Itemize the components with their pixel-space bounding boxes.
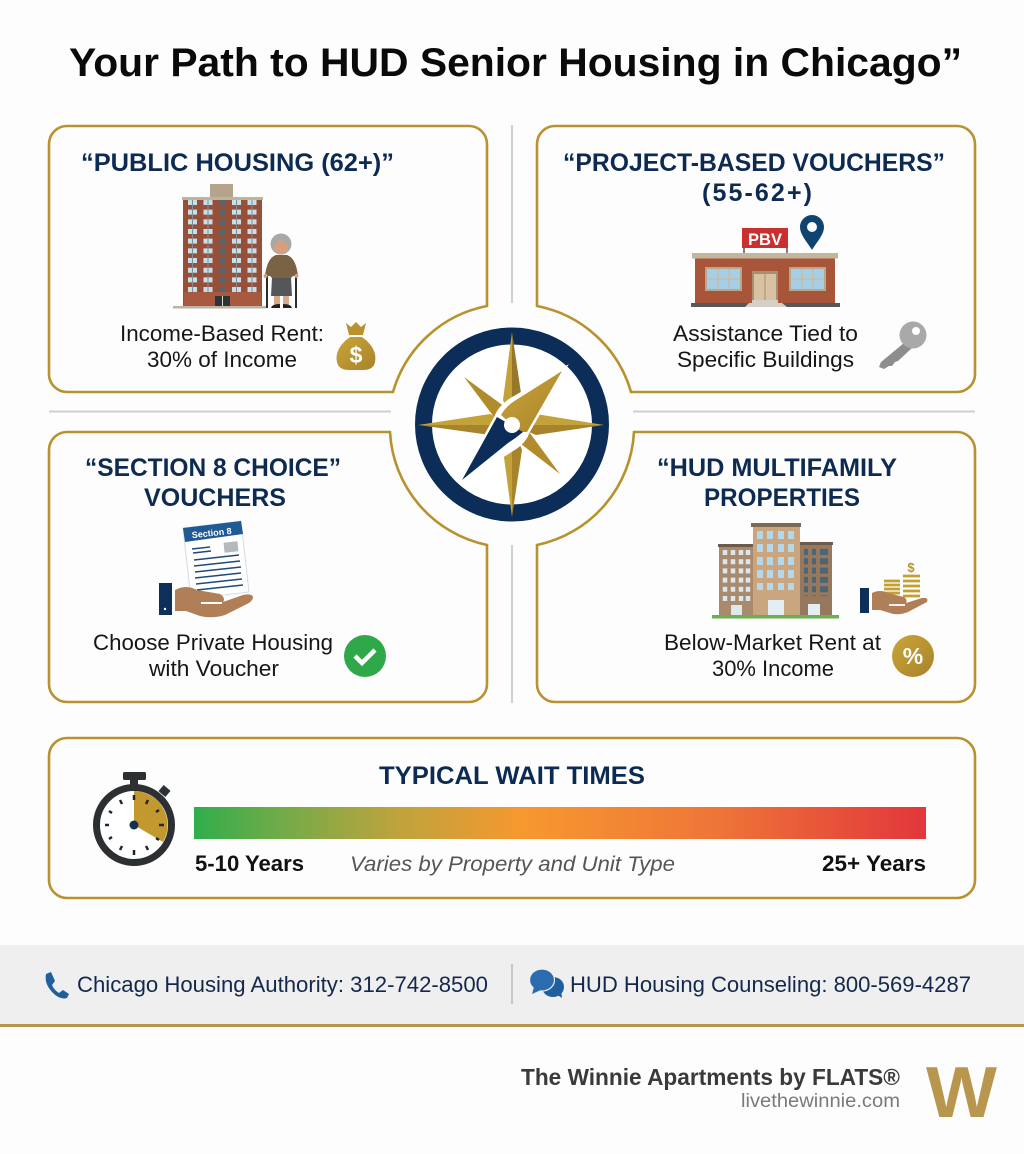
text: website: livethewinnie.com: [741, 1091, 900, 1112]
icon: compass: [418, 332, 604, 517]
heading: typical wait times: TYPICAL WAIT TIMES: [379, 762, 645, 790]
panel outline: section 8 choice vouchers: [49, 432, 487, 702]
icon: green check: [344, 635, 386, 677]
panel outline: public housing: [49, 126, 487, 392]
icon: location pin: [800, 215, 824, 250]
panel outline: HUD multifamily properties: [537, 432, 975, 702]
text: assistance tied to buildings: [673, 321, 858, 372]
text: choose private housing: Choose Private Housing: [93, 630, 333, 655]
panel: HUD multifamily properties: [537, 432, 975, 702]
chart: wait time gradient bar: [194, 807, 926, 839]
icon: money bag: $: [350, 342, 363, 368]
icon: hand with coins: [860, 560, 927, 614]
icon: senior woman with canes: [264, 234, 298, 308]
heading: project-based vouchers: [563, 149, 945, 207]
heading: public housing: “PUBLIC HOUSING (62+)”: [81, 149, 394, 177]
panel: public housing: [49, 126, 487, 392]
text: income based rent: [120, 321, 324, 372]
text: assistance tied to buildings: Assistance Tied to: [673, 321, 858, 346]
icon: money bag: [337, 322, 375, 370]
panel: section 8 choice vouchers: [49, 432, 487, 702]
icon: stopwatch: [96, 772, 172, 862]
logo: W: W: [926, 1053, 997, 1133]
text: assistance tied to buildings: Specific Buildings: [677, 347, 854, 372]
icon: hand with coins: $: [907, 560, 915, 575]
icon: phone: [46, 972, 69, 998]
text: income based rent: Income-Based Rent:: [120, 321, 324, 346]
text: brand name: The Winnie Apartments by FLATS®: [521, 1064, 900, 1090]
icon: percent badge: %: [903, 643, 923, 669]
heading: HUD multifamily properties: PROPERTIES: [704, 484, 860, 512]
compass needle: [462, 371, 562, 480]
icon: PBV building: [691, 228, 840, 307]
text: below-market rent: 30% Income: [712, 656, 834, 681]
text: below-market rent: Below-Market Rent at: [664, 630, 881, 655]
heading: section 8 choice vouchers: VOUCHERS: [144, 484, 286, 512]
panel: typical wait times: [49, 738, 975, 898]
contact band: [0, 945, 1024, 1027]
icon: key: [879, 322, 926, 369]
panel outline: wait times: [49, 738, 975, 898]
text: choose private housing: [93, 630, 333, 681]
heading: HUD multifamily properties: “HUD MULTIFAMILY: [657, 454, 897, 482]
label: 5-10 years: 5-10 Years: [195, 851, 304, 876]
icon: PBV building: PBV: [748, 230, 783, 249]
heading: project-based vouchers: (55-62+): [702, 179, 812, 207]
panel: project-based vouchers: [537, 126, 975, 392]
text: Chicago Housing Authority: Chicago Housing Authority: 312-742-8500: [77, 972, 488, 997]
icon: apartment buildings: [712, 523, 839, 618]
icon: percent badge: [892, 635, 934, 677]
heading: HUD multifamily properties: [657, 454, 897, 512]
compass diagonal points: [464, 377, 560, 474]
icon: speech bubbles: [530, 969, 564, 998]
footer brand: [521, 1053, 997, 1133]
text: choose private housing: with Voucher: [148, 656, 279, 681]
text: below-market rent: [664, 630, 881, 681]
icon: giving hand: [159, 583, 253, 617]
icon: voucher document: Section 8: [191, 526, 232, 540]
text: income based rent: 30% of Income: [147, 347, 297, 372]
icon: voucher document: [183, 521, 249, 599]
panel outline: project-based vouchers: [537, 126, 975, 392]
heading: section 8 choice vouchers: “SECTION 8 CHOICE”: [85, 454, 341, 482]
text: HUD Housing Counseling: HUD Housing Counseling: 800-569-4287: [570, 972, 971, 997]
heading: project-based vouchers: “PROJECT-BASED VOUCHERS”: [563, 149, 945, 177]
label: varies note: Varies by Property and Unit Type: [350, 853, 675, 876]
title: Your Path to HUD Senior Housing in Chicago”: [69, 41, 962, 85]
label: 25+ years: 25+ Years: [822, 851, 926, 876]
compass main star: [418, 332, 604, 517]
icon: apartment tower: [173, 184, 266, 308]
heading: section 8 choice vouchers: [85, 454, 341, 512]
